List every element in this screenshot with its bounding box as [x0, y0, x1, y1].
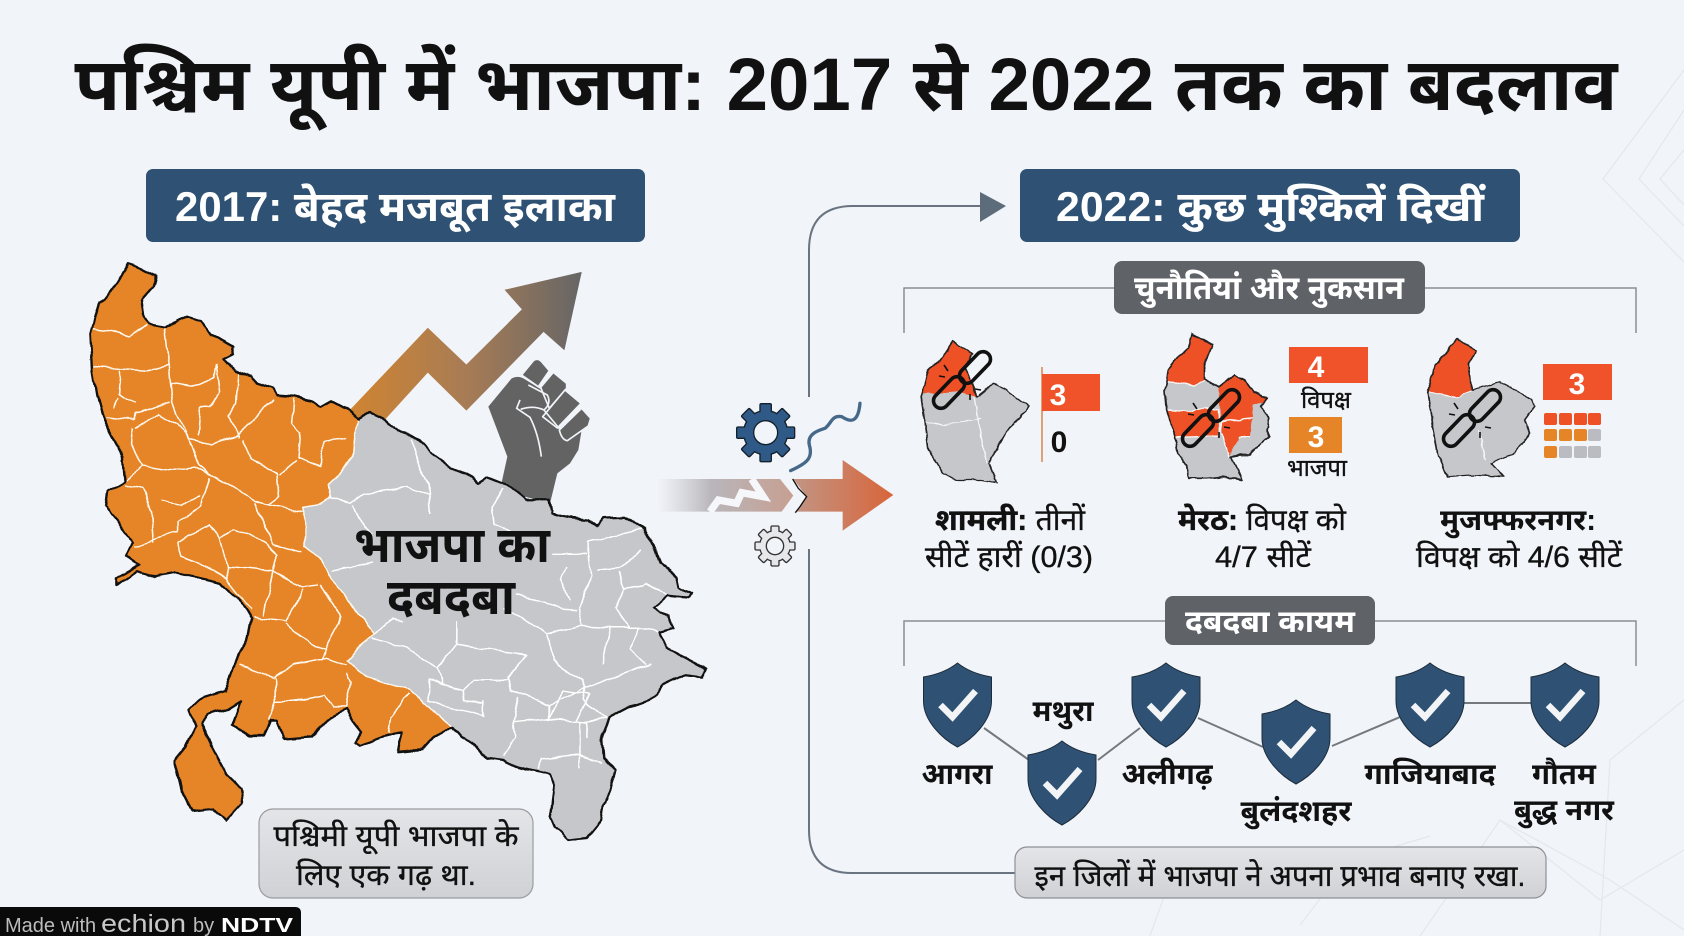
legend: Muzaffarnagar seats: 3	[1569, 368, 1585, 401]
text: Meerut: 4/7 सीटें	[1215, 540, 1312, 574]
panel: 2022 heading: 2022: कुछ मुश्किलें दिखीं	[1056, 183, 1487, 232]
arrow: faded broken arrow	[657, 460, 893, 531]
legend: Meerut seats: 4	[1308, 351, 1325, 384]
footer: made with echion by NDTV	[0, 907, 301, 936]
callout: influence maintained: इन जिलों में भाजपा ने अपना प्रभाव बनाए रखा.	[1034, 858, 1526, 893]
icon: shield Aligarh	[1132, 663, 1200, 747]
icon: broken chain Shamli	[930, 349, 994, 411]
legend: Meerut seats: 3	[1308, 421, 1324, 454]
map: Shamli	[920, 340, 1030, 484]
icon: broken chain Meerut	[1179, 387, 1243, 449]
heading: challenges	[904, 261, 1636, 333]
arrow: connector from centre to bottom note	[809, 549, 1015, 873]
icon: blue gear	[737, 404, 795, 462]
text: Shamli: शामली: तीनों	[935, 503, 1086, 537]
district labels	[922, 695, 1615, 830]
district labels: गाजियाबाद	[1364, 757, 1497, 791]
icon: shield Agra	[924, 663, 992, 747]
callout: stronghold note: लिए एक गढ़ था.	[296, 858, 476, 892]
icon: shield Ghaziabad	[1396, 663, 1464, 747]
district labels: आगरा	[922, 758, 994, 791]
flag: Shamli score: 0	[1051, 426, 1067, 459]
text: Shamli: सीटें हारीं (0/3)	[925, 540, 1093, 574]
icon: grey gear	[755, 526, 795, 566]
legend: Meerut seats	[1287, 347, 1368, 482]
panel: challenges and losses	[904, 261, 1636, 574]
callout: stronghold note: पश्चिमी यूपी भाजपा के	[274, 818, 519, 855]
district labels: मथुरा	[1032, 695, 1095, 730]
text: Meerut: मेरठ: विपक्ष को	[1178, 502, 1347, 537]
callout: stronghold note	[259, 809, 533, 898]
map: Uttar Pradesh	[89, 262, 708, 842]
title: पश्चिम यूपी में भाजपा: 2017 से 2022 तक का बदलाव	[74, 43, 1619, 131]
heading: dominance	[904, 596, 1636, 666]
flag: Shamli score: 3	[1050, 379, 1066, 412]
heading: dominance: दबदबा कायम	[1185, 604, 1356, 639]
panel: dominance maintained	[904, 596, 1636, 830]
flag: Shamli score	[1042, 367, 1100, 462]
text: Shamli	[925, 503, 1093, 574]
icon: shield Gautam Buddh Nagar	[1531, 663, 1599, 747]
map label	[354, 517, 551, 625]
icon: shield Mathura	[1028, 741, 1096, 825]
legend: Meerut seats: भाजपा	[1287, 455, 1348, 482]
map label: भाजपा का	[354, 517, 551, 573]
icon: broken transition arrow with gears	[657, 403, 893, 566]
panel: 2017 map with growth arrow and fist	[89, 262, 708, 842]
district labels: अलीगढ़	[1122, 757, 1213, 791]
district labels: बुद्ध नगर	[1514, 794, 1615, 829]
panel: 2017 heading	[146, 169, 645, 242]
panel: 2017 heading: 2017: बेहद मजबूत इलाका	[175, 183, 616, 233]
connector lines between shields	[984, 703, 1531, 760]
map label: दबदबा	[387, 569, 516, 625]
icon: broken chain Muzaffarnagar	[1440, 387, 1504, 449]
icon: rising growth arrow	[348, 272, 582, 424]
map: Muzaffarnagar	[1426, 338, 1536, 478]
callout: influence maintained	[1015, 847, 1546, 898]
icon: shield Bulandshahr	[1262, 700, 1330, 784]
map: Meerut	[1163, 332, 1271, 482]
text: Muzaffarnagar: मुजफ्फरनगर:	[1440, 504, 1596, 539]
icon: squiggle	[791, 403, 860, 471]
legend: Muzaffarnagar seats	[1543, 364, 1612, 458]
arrow: connector from centre to 2022 heading	[809, 192, 1006, 397]
district labels: गौतम	[1532, 757, 1596, 791]
legend: Meerut seats: विपक्ष	[1301, 386, 1352, 414]
district labels: बुलंदशहर	[1240, 795, 1352, 830]
text: Muzaffarnagar: विपक्ष को 4/6 सीटें	[1416, 540, 1623, 574]
icon: raised fist	[488, 359, 591, 503]
text: Muzaffarnagar	[1416, 504, 1623, 574]
panel: 2022 heading	[1020, 169, 1520, 242]
heading: challenges: चुनौतियां और नुकसान	[1134, 269, 1405, 309]
text: Meerut	[1178, 502, 1347, 574]
